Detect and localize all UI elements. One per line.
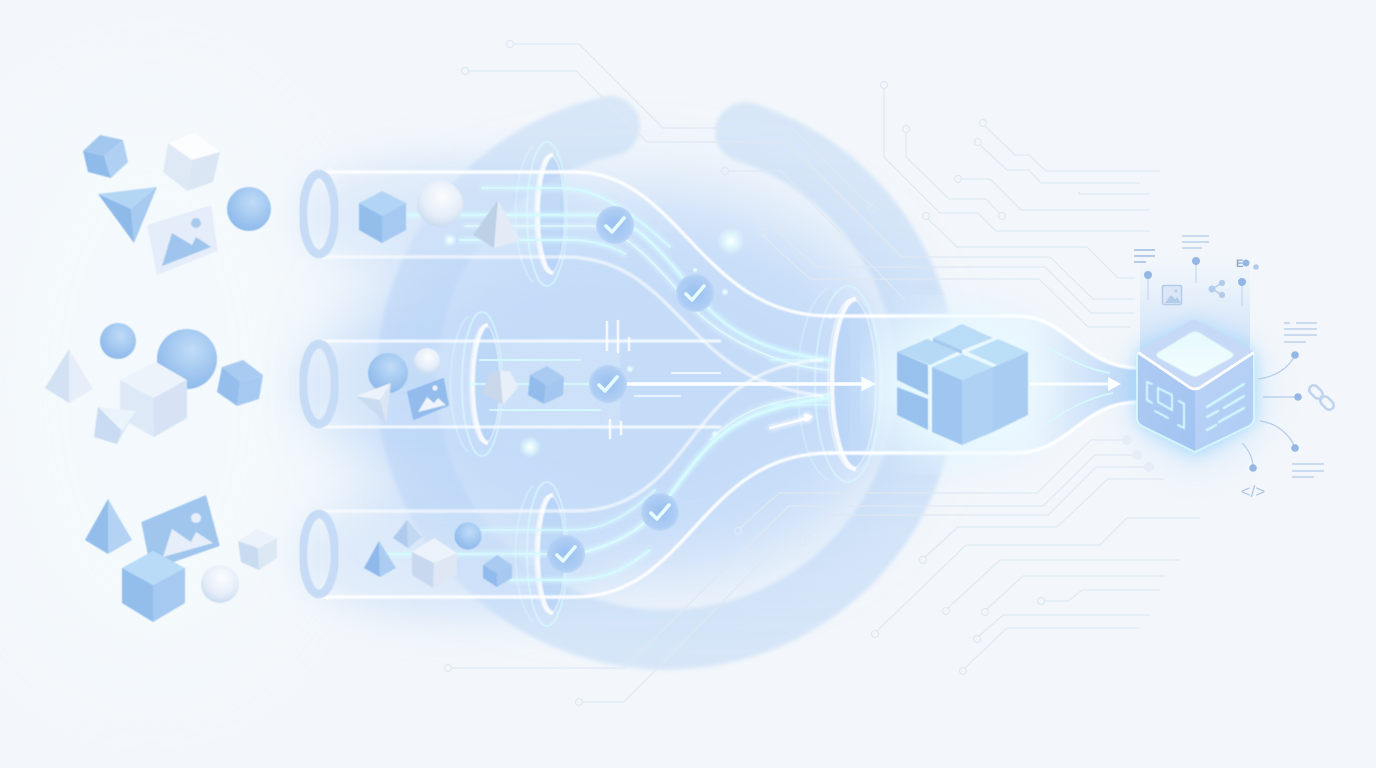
pale wash behind source clusters — [0, 95, 320, 675]
circuit traces — [444, 40, 1200, 706]
small pale pyramid — [393, 520, 422, 548]
bracket glyph on left face — [1147, 382, 1184, 428]
blue cube — [528, 366, 564, 404]
flow lines: bottom tube — [385, 360, 830, 580]
check badge 1 — [596, 206, 634, 244]
tube outline: top — [322, 172, 830, 396]
glow particles — [443, 227, 745, 458]
small white cube — [238, 529, 277, 570]
right output icons — [1241, 323, 1336, 501]
right rear block — [968, 339, 1028, 432]
blue sphere — [368, 353, 408, 393]
check badge 5 — [547, 535, 585, 573]
back slab — [933, 324, 993, 350]
large white cube — [120, 362, 187, 437]
tube outline: middle — [322, 341, 720, 427]
pipeline tube fills — [320, 172, 1140, 597]
check badge 4 — [641, 493, 679, 531]
white cube — [412, 538, 457, 588]
small faceted shape — [94, 407, 136, 444]
faceted gem — [482, 371, 518, 405]
flow lines: top tube — [407, 188, 830, 370]
blue pyramid — [85, 499, 132, 554]
source cluster 2 — [45, 323, 263, 444]
portal ring: middle tube — [451, 312, 503, 456]
output arrow — [1030, 347, 1121, 423]
tube outline: bottom — [322, 360, 830, 597]
tube contents: bottom — [364, 520, 512, 588]
blue triangle — [98, 187, 157, 243]
large circular arc behind pipeline — [406, 126, 926, 640]
portal ring: bottom tube — [516, 482, 568, 626]
portal ring: merge point — [798, 286, 881, 482]
text lines on right face — [1207, 384, 1244, 430]
source cluster 3 — [85, 497, 277, 622]
cyan glow — [1137, 322, 1255, 456]
upward light beam — [1140, 252, 1250, 352]
top inset panel — [1156, 332, 1234, 376]
blue image card — [143, 497, 218, 568]
text lines icon — [1134, 250, 1155, 262]
blue pyramid — [364, 541, 396, 577]
white triangle — [356, 383, 391, 423]
top output icons — [1134, 236, 1259, 306]
front block — [932, 354, 993, 445]
large blue sphere — [157, 329, 217, 389]
merged central block — [877, 310, 1047, 460]
share icon — [1209, 280, 1225, 298]
tube outline: merged bottle to output — [830, 316, 1140, 453]
top face — [1138, 320, 1254, 389]
white cube — [163, 133, 220, 191]
link icon — [1307, 383, 1336, 412]
image icon — [1162, 286, 1182, 304]
small white sphere — [414, 348, 440, 374]
pin — [1238, 278, 1246, 306]
tube contents: top — [359, 181, 520, 248]
soft blue glow behind pipeline — [290, 160, 1265, 620]
right face — [1195, 354, 1255, 452]
output hub cube — [1137, 252, 1255, 456]
white sphere — [201, 565, 239, 603]
image card — [149, 207, 216, 273]
connector dot — [1242, 443, 1257, 472]
blue cube — [359, 191, 406, 243]
left upper block — [897, 339, 957, 395]
white lower rim of top face — [1139, 353, 1253, 389]
white sphere — [417, 181, 463, 227]
check badge 2 — [676, 274, 714, 312]
check badge 3 — [589, 365, 627, 403]
left face — [1137, 354, 1195, 452]
small blue sphere — [100, 323, 136, 359]
connector dot — [1258, 351, 1299, 379]
pin — [1192, 257, 1200, 283]
blue sphere — [227, 187, 271, 231]
connector dot — [1263, 393, 1302, 401]
edge highlights — [1137, 354, 1254, 452]
text lines icon — [1292, 464, 1324, 477]
white pyramid — [45, 349, 93, 403]
portal ring: top tube — [516, 142, 568, 286]
large blue cube — [122, 551, 185, 622]
tube contents: middle — [356, 348, 564, 423]
grey pyramid — [473, 200, 520, 248]
text lines icon — [1284, 323, 1317, 342]
blue sphere — [454, 522, 482, 550]
blue cube — [83, 135, 128, 178]
source cluster 1 — [83, 133, 271, 273]
blue cube — [217, 360, 263, 406]
blue cube — [483, 555, 512, 587]
connector dot — [1260, 421, 1299, 452]
tube inlet rings — [303, 174, 335, 594]
pin — [1144, 271, 1152, 300]
text lines icon — [1182, 236, 1209, 248]
blue image card — [408, 379, 448, 419]
code icon: </> — [1241, 482, 1265, 501]
flow lines: middle tube with arrow — [470, 321, 875, 438]
left lower block — [897, 387, 928, 430]
small label with dots: E — [1236, 258, 1243, 270]
